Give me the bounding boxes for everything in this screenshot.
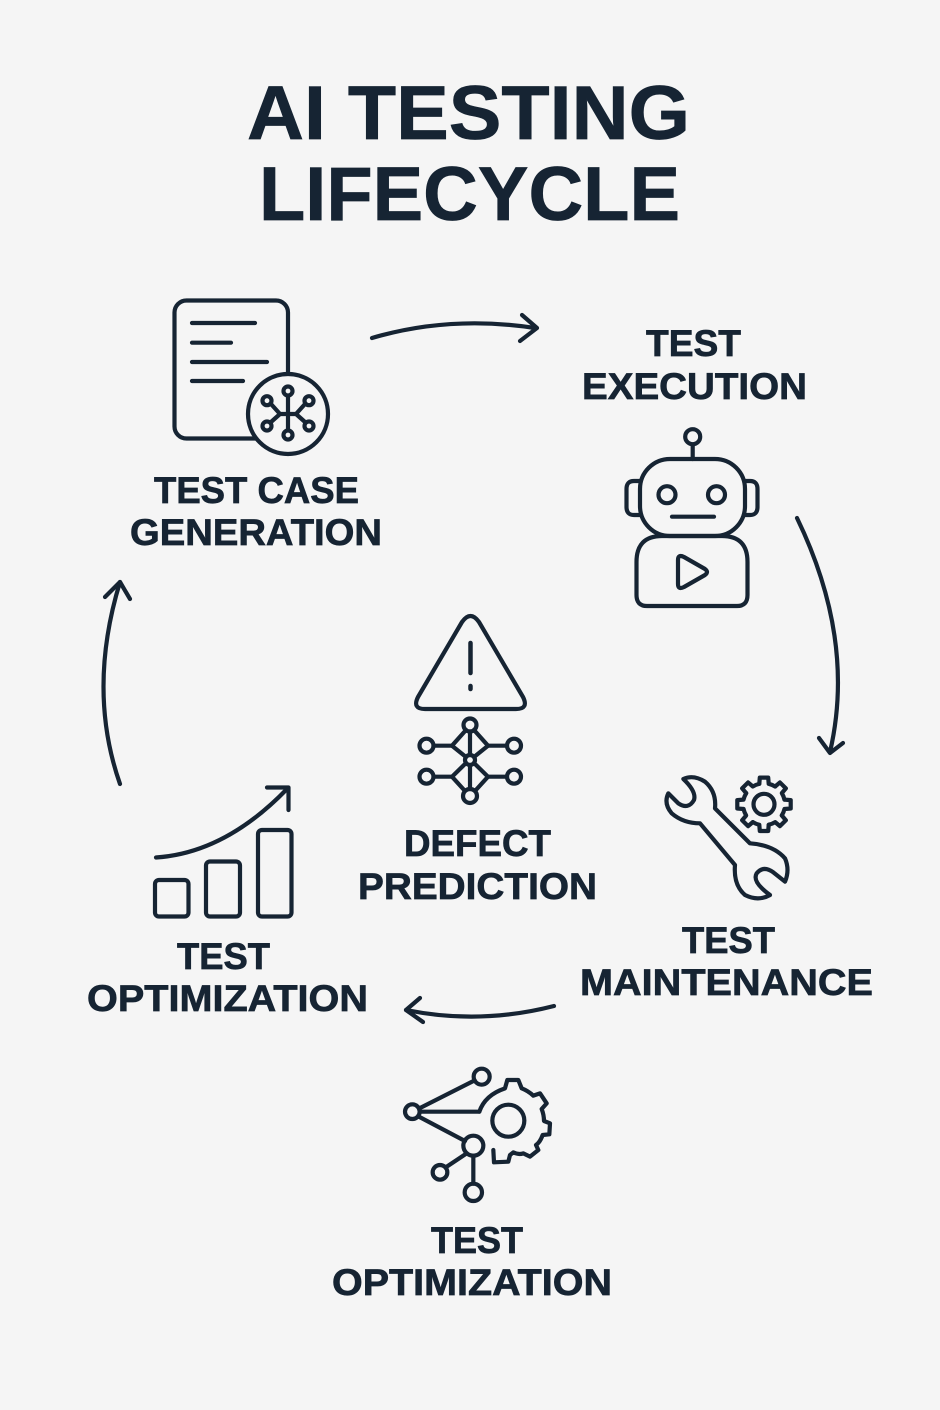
- label: test optimization left: TEST: [177, 936, 270, 977]
- title: [247, 71, 690, 237]
- icon: rising bar chart: [155, 788, 292, 916]
- icon: warning triangle with network: [416, 616, 525, 803]
- icon: wrench and gear: [666, 777, 791, 898]
- panel: test case generation: [130, 300, 382, 553]
- label: test execution: [582, 323, 807, 407]
- label: test execution: TEST: [646, 323, 741, 364]
- panel: defect prediction: [358, 616, 597, 907]
- icon: document with network circle: [174, 300, 328, 454]
- label: test optimization left: OPTIMIZATION: [87, 978, 368, 1019]
- panel: test execution: [582, 323, 807, 606]
- label: defect prediction: [358, 823, 597, 907]
- label: defect prediction: DEFECT: [404, 823, 551, 864]
- icon: network with gear: [405, 1069, 550, 1201]
- arrow: generation to execution: [372, 315, 537, 341]
- label: test maintenance: MAINTENANCE: [580, 962, 873, 1003]
- label: test optimization bottom: TEST: [431, 1220, 523, 1261]
- label: test case generation: [130, 470, 382, 553]
- arrow: execution to maintenance: [797, 518, 843, 753]
- icon: robot with play button: [626, 429, 758, 606]
- title: LIFECYCLE: [259, 152, 680, 237]
- arrow: optimization to generation: [104, 582, 130, 784]
- label: test execution: EXECUTION: [582, 366, 807, 407]
- label: test optimization left: [87, 936, 368, 1019]
- panel: test maintenance: [580, 777, 873, 1003]
- label: defect prediction: PREDICTION: [358, 866, 597, 907]
- title: AI TESTING: [247, 71, 690, 156]
- label: test maintenance: [580, 920, 873, 1003]
- label: test maintenance: TEST: [682, 920, 775, 961]
- label: test case generation: GENERATION: [130, 512, 382, 553]
- label: test optimization bottom: [332, 1220, 612, 1303]
- label: test optimization bottom: OPTIMIZATION: [332, 1262, 612, 1303]
- arrow: maintenance to optimization: [406, 998, 554, 1022]
- label: test case generation: TEST CASE: [154, 470, 359, 511]
- panel: test optimization bottom: [332, 1069, 612, 1303]
- panel: test optimization left: [87, 788, 368, 1019]
